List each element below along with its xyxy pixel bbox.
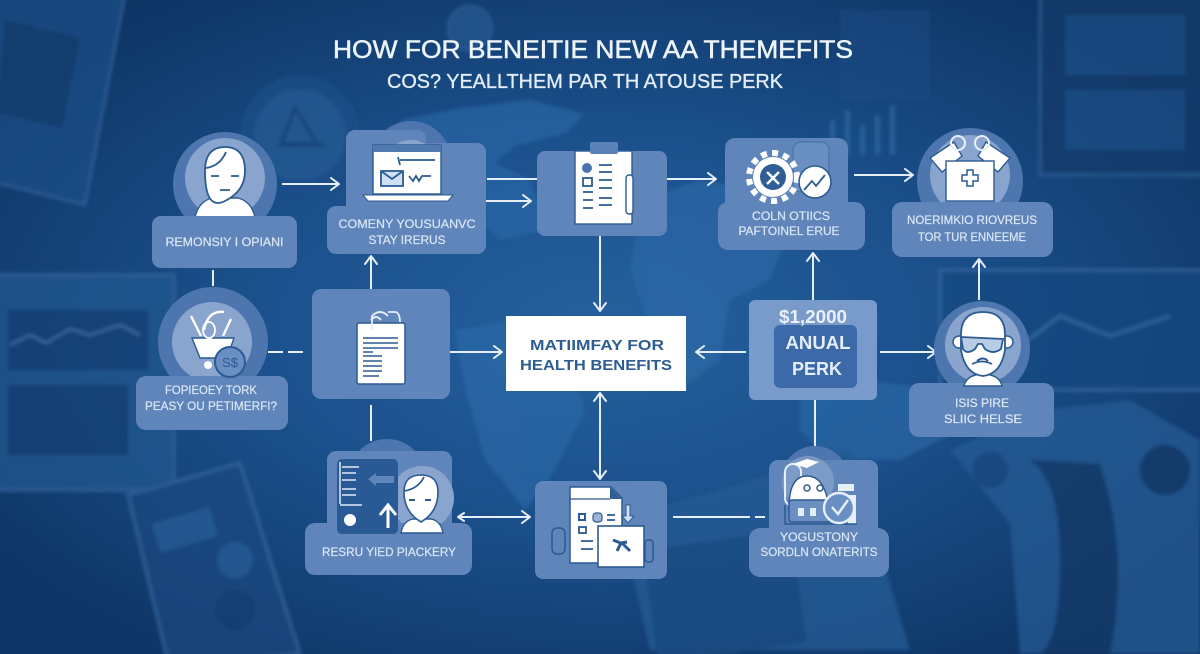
icon: person <box>194 147 256 224</box>
node: cart with coin: FOPIEOEY TORK <box>165 385 257 397</box>
icon: shopping cart: S$ <box>222 355 239 370</box>
icon: bald person <box>953 312 1013 386</box>
central box: MATIIMFAY FOR <box>530 337 664 354</box>
icon: medical kit <box>930 136 1010 201</box>
node: annual perk: $1,2000 <box>779 307 847 327</box>
node: gears: COLN OTIICS <box>752 211 830 223</box>
icon: clipboard <box>575 142 633 224</box>
node: person with glasses: SLIIC HELSE <box>944 414 1022 426</box>
subtitle: COS? YEALLTHEM PAR TH ATOUSE PERK <box>387 71 784 93</box>
node: annual perk: ANUAL <box>786 333 850 353</box>
central box: HEALTH BENEFITS <box>520 357 672 374</box>
node: robot agent: YOGUSTONY <box>780 532 858 544</box>
icon: forms and stamp <box>552 487 653 567</box>
node: annual perk <box>749 300 877 400</box>
node: gears <box>718 138 865 250</box>
node: person with headset: REMONSIY I OPIANI <box>166 237 284 249</box>
node: document <box>312 289 450 399</box>
arrows <box>213 169 985 523</box>
node: id card with agent <box>305 439 472 575</box>
node: medical kit: NOERIMKIO RIOVREUS <box>907 215 1037 227</box>
node: person with glasses: ISIS PIRE <box>955 398 1009 410</box>
node: id card with agent: RESRU YIED PIACKERY <box>322 547 456 559</box>
node: forms <box>535 481 667 579</box>
icon: document <box>357 312 405 384</box>
node: laptop: STAY IRERUS <box>368 235 446 247</box>
node: person with glasses <box>909 301 1054 437</box>
node: laptop: COMENY YOUSUANVC <box>338 219 476 231</box>
icon: laptop with envelope <box>363 145 453 201</box>
title <box>333 36 853 93</box>
node: gears: PAFTOINEL ERUE <box>738 226 840 238</box>
icon: gear and badge <box>749 153 831 201</box>
icon: card with up arrow <box>337 459 398 534</box>
node: clipboard <box>537 142 667 236</box>
node: annual perk: PERK <box>792 359 842 379</box>
node: robot agent <box>749 446 889 577</box>
node: medical kit: TOR TUR ENNEEME <box>918 232 1026 244</box>
node: cart with coin <box>136 287 288 430</box>
node: person with headset <box>152 132 297 268</box>
node: cart with coin: PEASY OU PETIMERFI? <box>145 401 277 413</box>
icon: shopping cart <box>191 312 245 377</box>
node: laptop <box>327 121 486 254</box>
node: medical kit <box>892 128 1053 257</box>
icon: robot with check badge <box>785 459 857 524</box>
title: HOW FOR BENEITIE NEW AA THEMEFITS <box>333 36 853 64</box>
node: robot agent: SORDLN ONATERITS <box>760 547 878 559</box>
central box <box>506 316 686 391</box>
icon: agent <box>401 475 443 533</box>
